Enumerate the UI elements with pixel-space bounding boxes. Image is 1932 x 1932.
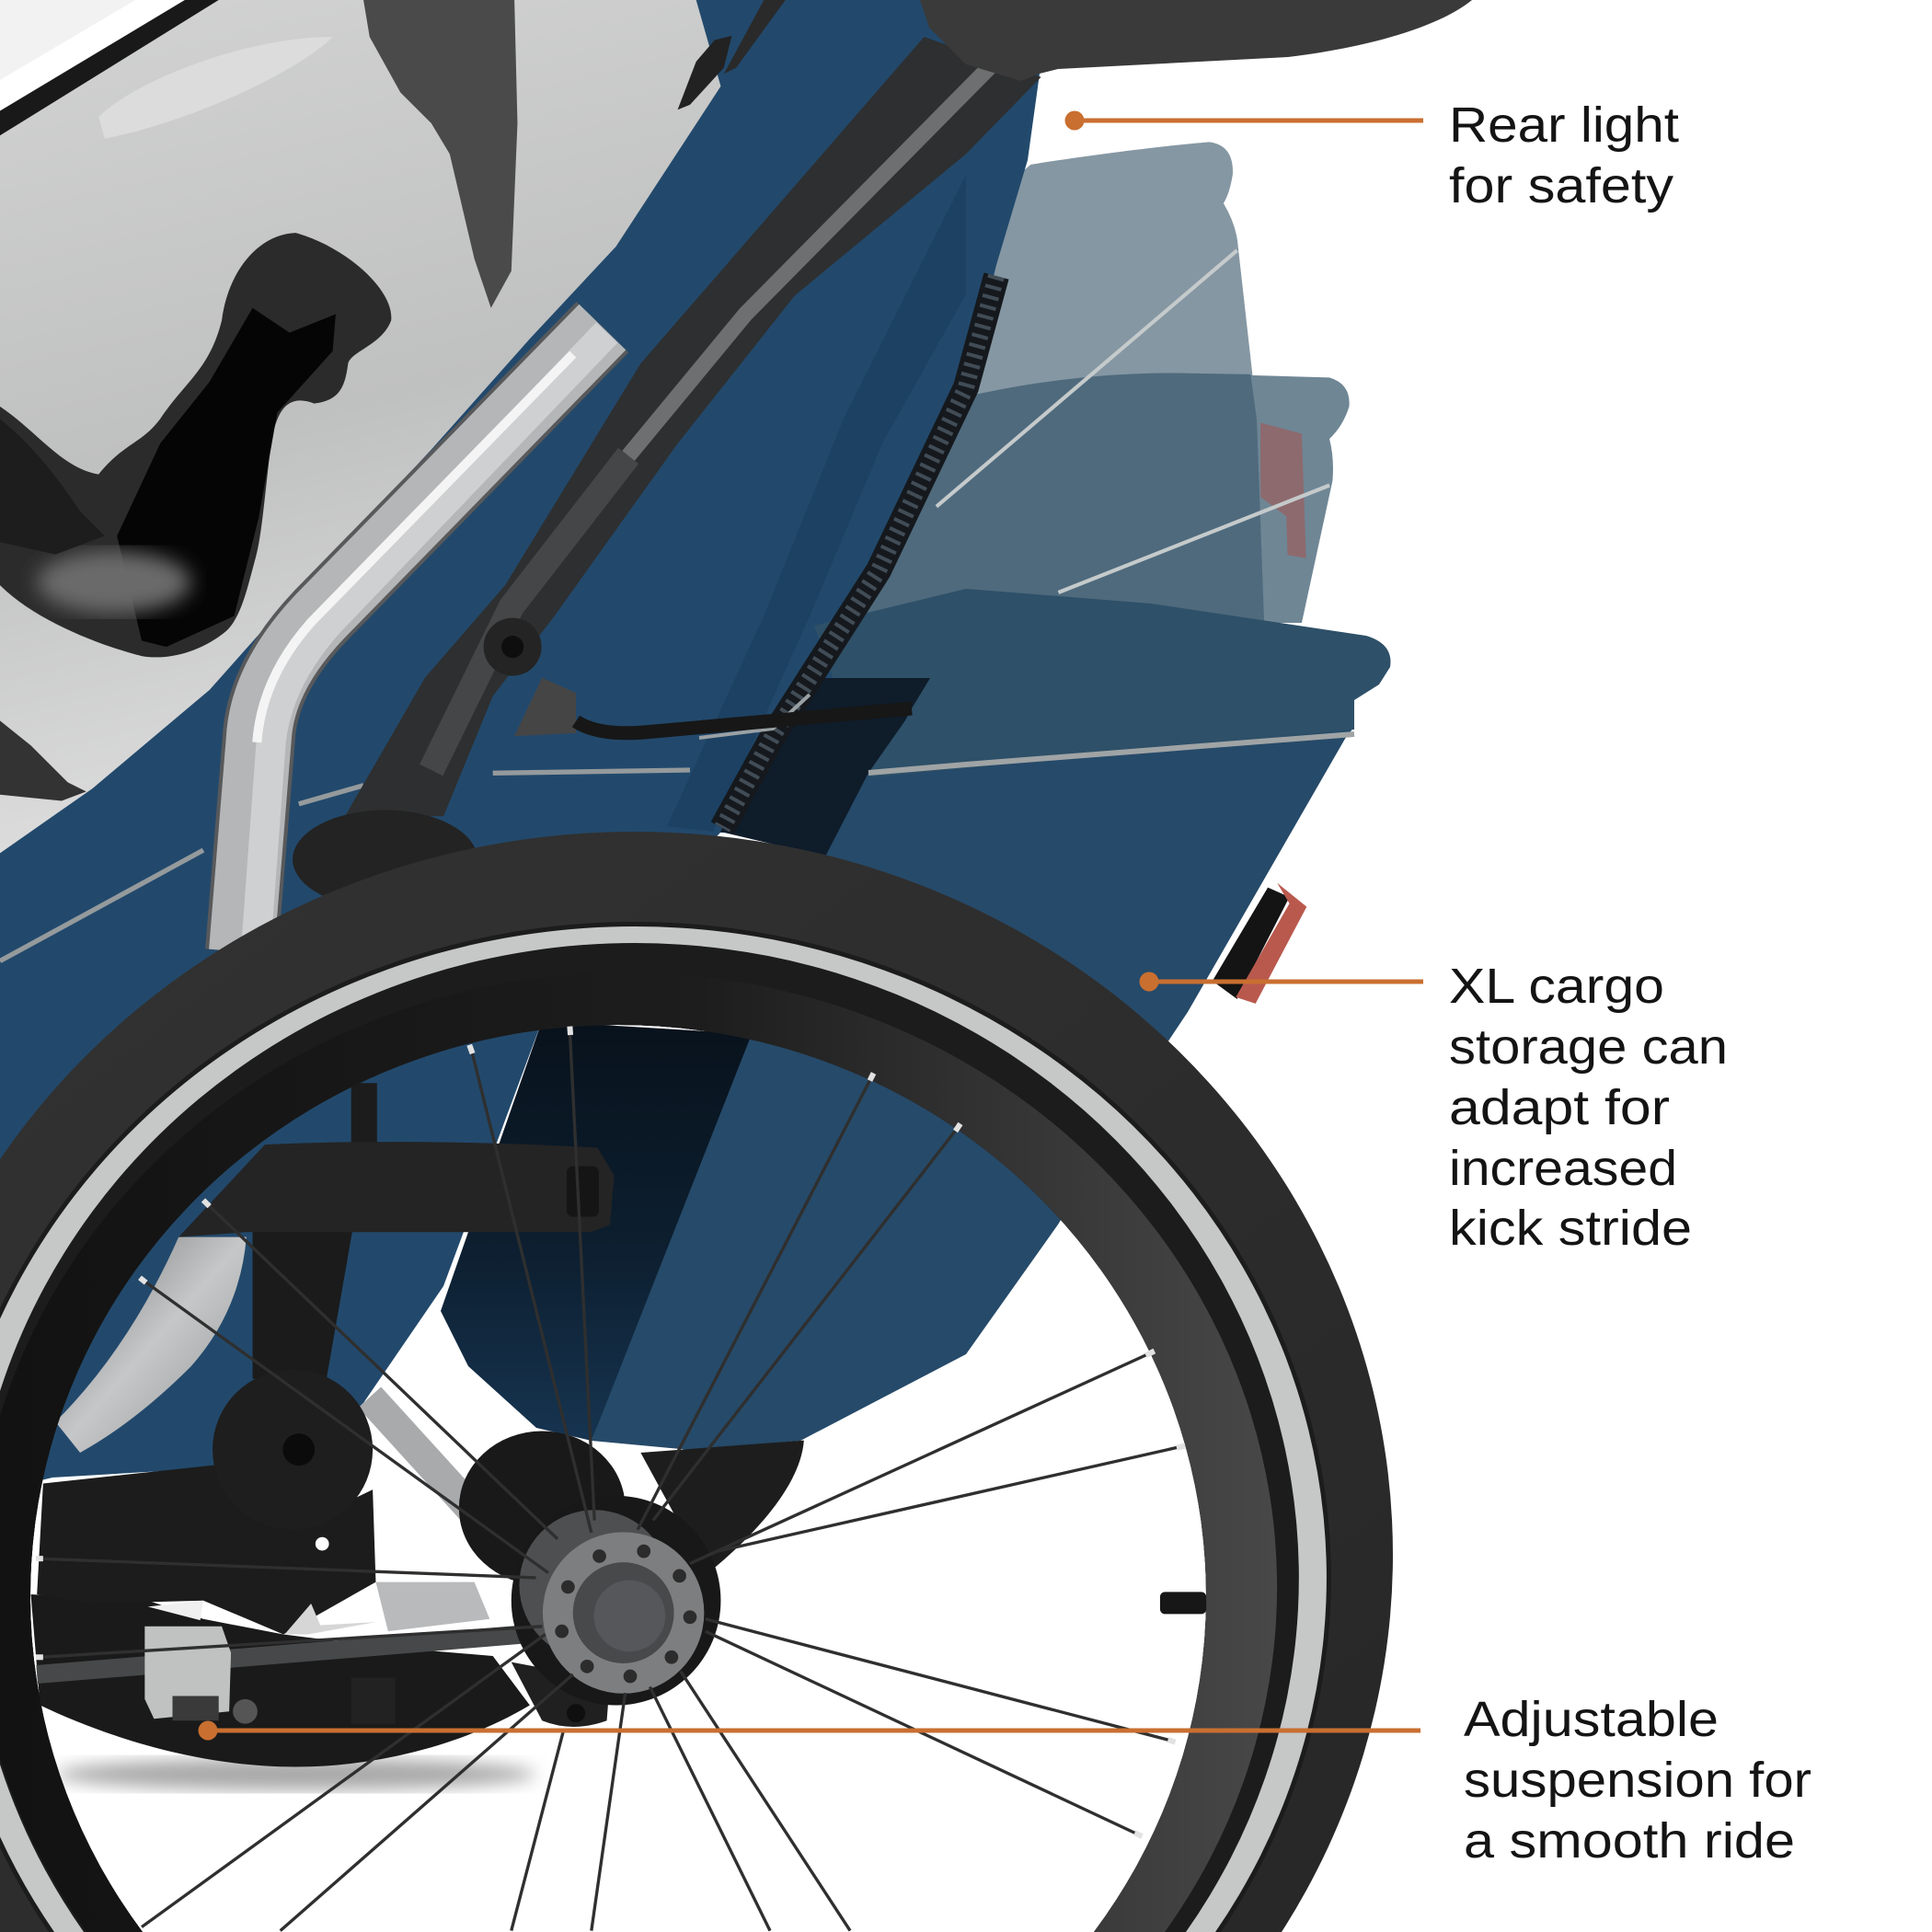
ground shadow [55,1758,536,1790]
callout text: kick stride [1449,1201,1692,1256]
callout dot [199,1720,217,1741]
frame arm [345,37,1041,816]
silver crescent [55,1237,247,1453]
frame bolt [484,618,542,676]
fabric fold [667,175,966,832]
callout text [1449,98,1679,213]
dark main frame [293,0,1041,909]
tube outline [241,328,603,952]
cord [576,708,912,733]
chassis plate [37,1465,375,1635]
cargo top flap [814,589,1390,777]
cord bracket [514,678,576,736]
hub black disc [512,1496,720,1706]
frame strip [724,0,786,74]
rear wheel [0,832,1393,1932]
hub centre [573,1562,674,1663]
plate gap right [284,1604,375,1635]
hub flange [543,1532,704,1694]
cargo lower panel [592,727,1354,1450]
axle nut [567,1704,585,1722]
handlebar [920,0,1472,81]
silver bracket [375,1582,489,1631]
reflection: lower left shape [0,720,86,800]
valve [1160,1592,1206,1614]
shock rods [37,1635,523,1674]
frame lighter rail [628,46,1010,456]
reflective band [0,926,1327,1932]
reflection: black core [117,308,336,647]
silver clamp [144,1627,231,1719]
spokes [36,1027,1185,1931]
ghost positions of the cargo storage [794,142,1350,623]
clamp latch [172,1696,219,1720]
ghost: reflective strips [937,250,1329,592]
callout text: adapt for [1449,1080,1670,1135]
callout text: suspension for [1464,1753,1811,1808]
callout text: XL cargo [1449,959,1664,1014]
reflection: small dark shape [678,36,731,109]
ghost: overlap shade [794,373,1264,623]
reflection: grey soft patch [37,551,191,613]
mesh side pocket [722,276,996,828]
frame mid rail [431,456,628,770]
callout text [1464,1692,1811,1869]
silver frame tube [241,328,607,952]
callout text: a smooth ride [1464,1813,1795,1869]
tyre groove [0,922,1331,1932]
post [253,1231,352,1379]
window highlight [98,37,333,139]
callout: cargo storage [1139,959,1728,1256]
callout line [1149,979,1423,984]
pivot cap [293,811,477,909]
front cargo storage [441,589,1390,1450]
spoke nipples [36,1027,1185,1836]
cargo reflective strip [868,734,1354,773]
fork [640,1441,804,1573]
rim [0,972,1277,1932]
callout line [1075,118,1423,123]
reflection: large black shape [0,233,391,657]
red lens [1236,883,1306,1004]
light housing [1213,888,1290,999]
frame bolt head [501,636,523,658]
elastic cord [576,695,912,738]
ghost: middle cargo position [794,373,1350,623]
arm slot [567,1167,599,1217]
reflection: top grey shape [363,0,517,308]
light edge [699,695,810,738]
reflection: left dark patch [0,419,105,555]
callout text: Rear light [1449,98,1679,153]
clear window panel [0,0,731,853]
tube light face [256,333,607,952]
ghost: highest cargo position [794,142,1265,619]
rear light [1213,883,1306,1004]
hub cap [593,1581,665,1651]
callout line [208,1728,1420,1733]
adjust bolt [233,1699,258,1724]
mesh base [722,276,996,828]
upper post [351,1083,377,1148]
hub grey disc [519,1510,670,1661]
lower suspension and chassis [30,1083,804,1790]
silver strut [370,1397,493,1533]
callout: rear light [1065,98,1679,213]
window surface [0,0,720,853]
blue fabric body [0,0,1040,1490]
tube body [241,328,603,952]
suspension arm [178,1142,615,1237]
axle mount [512,1662,610,1727]
callout text: storage can [1449,1019,1728,1075]
reflective band lower left [0,1765,84,1932]
callout: suspension [199,1692,1811,1869]
reflective piping on fabric [0,770,690,961]
callout text: increased [1449,1141,1677,1196]
callout text [1449,959,1728,1256]
pivot bolt [282,1433,315,1466]
ghost: rear light [1260,422,1306,558]
window black edge strip [0,0,219,135]
window top white edge [0,0,135,80]
damper block [351,1677,396,1724]
callout text: for safety [1449,158,1673,213]
plate hole [316,1537,329,1550]
plate gap [148,1601,203,1620]
rear hub drum [459,1432,626,1585]
lower curved frame [30,1594,530,1766]
pivot cap [213,1370,373,1530]
callout text: Adjustable [1464,1692,1719,1747]
tube highlight [257,354,573,742]
cargo dark recess [720,678,930,857]
mesh holes [722,276,996,828]
callout dot [1065,110,1084,131]
tyre [0,832,1393,1932]
hub bolts [555,1545,696,1683]
cargo back panel [441,1021,752,1441]
callout dot [1139,972,1159,992]
